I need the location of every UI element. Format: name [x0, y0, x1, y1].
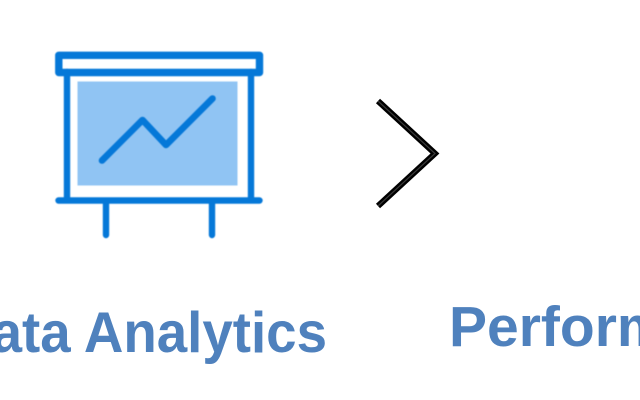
chart line — [102, 98, 212, 160]
board frame — [58, 55, 260, 235]
screen fill — [78, 82, 238, 186]
